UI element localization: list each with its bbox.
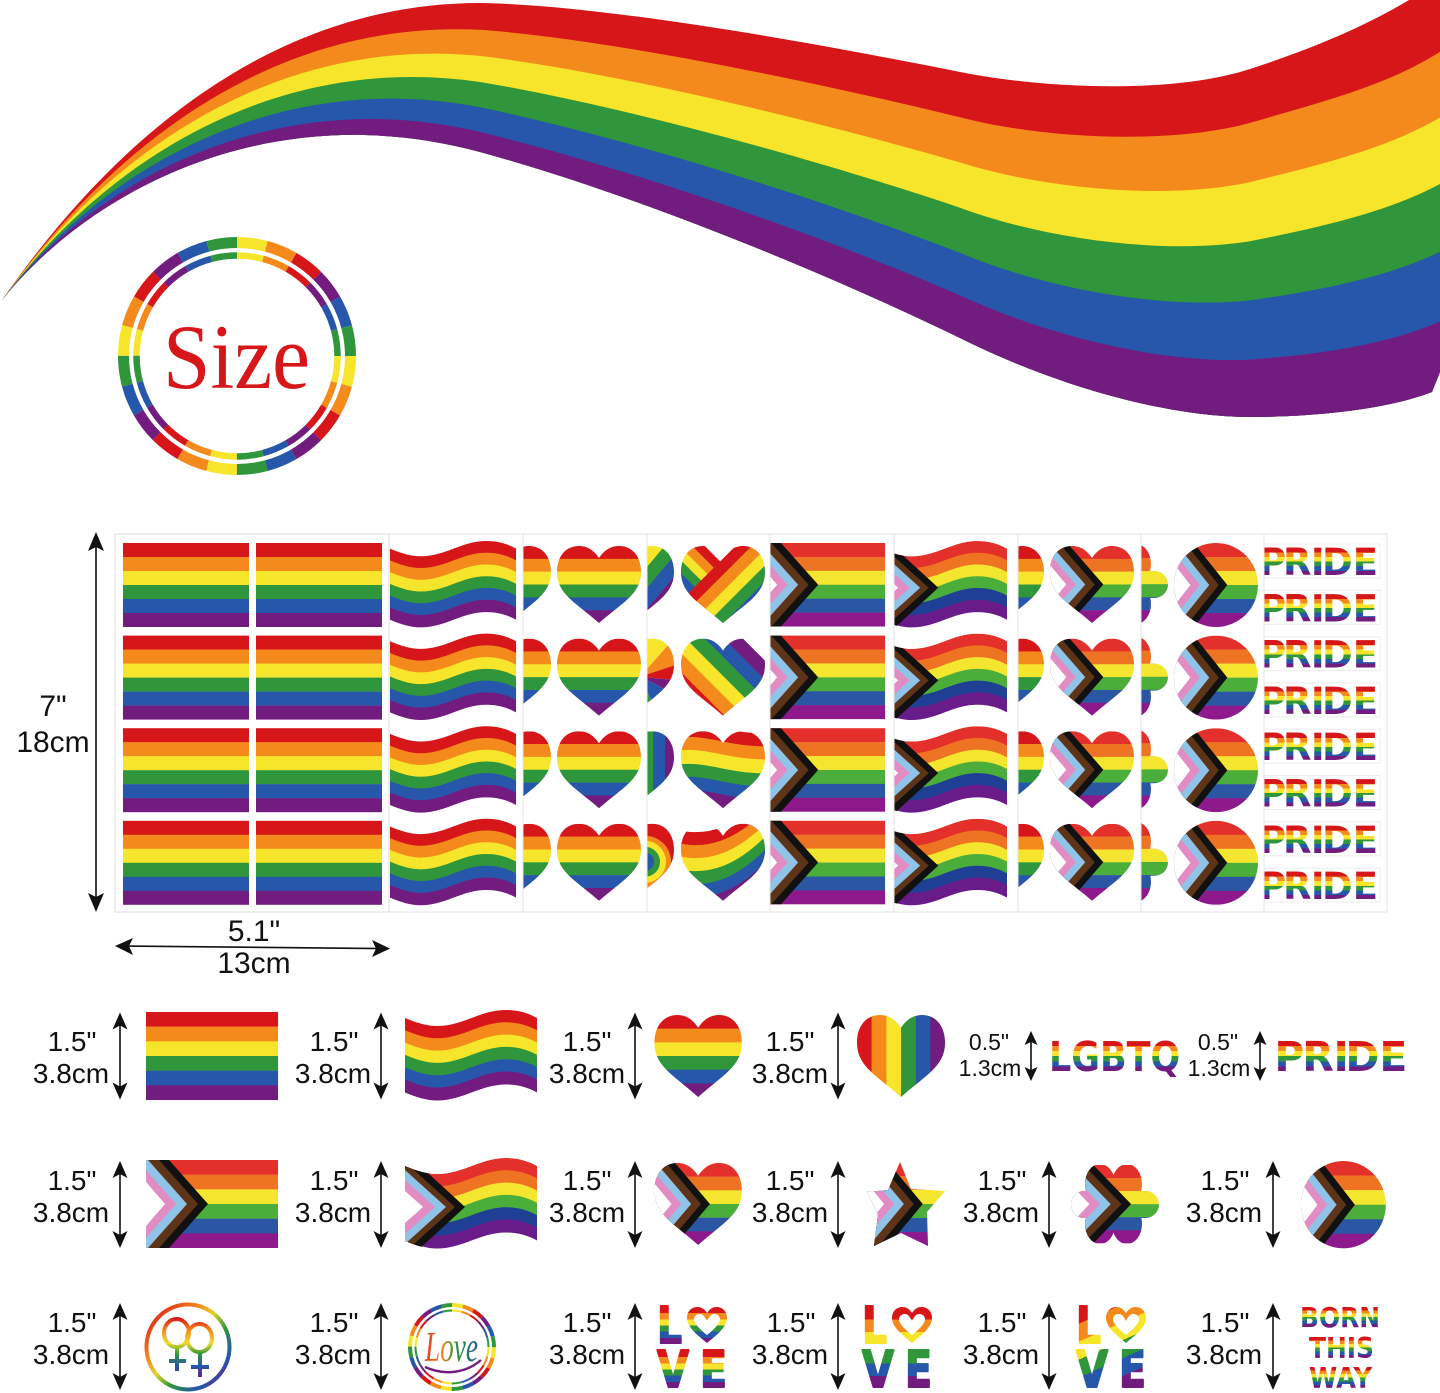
row 1: flag sticker with size: 3.8cm (33, 1058, 109, 1089)
sheet 1: rainbow flags (115, 534, 389, 912)
size heading: Size (163, 306, 310, 408)
sheet 7: progress hearts (900, 534, 1164, 912)
row 1: heart sticker with size (549, 1012, 821, 1100)
row 2: progress heart sticker with size: 1.5" (563, 1165, 611, 1196)
sheet 9: pride labels: PRIDE (1259, 819, 1378, 862)
sheet 9: pride labels: PRIDE (1259, 587, 1378, 630)
row 2: progress heart sticker with size: 3.8cm (549, 1197, 625, 1228)
row 3: LOVE sticker split rainbow with size: 1.5" (767, 1307, 815, 1338)
row 1: vertical stripe heart sticker with size: 1.5" (766, 1026, 814, 1057)
sheet 9: pride labels (1259, 534, 1387, 912)
row 1: vertical stripe heart sticker with size: 3.8cm (752, 1058, 828, 1089)
row 2: progress flower sticker with size (963, 1161, 1199, 1248)
row 2: progress flag sticker with size: 1.5" (48, 1165, 96, 1196)
sheet 4: patterned hearts (536, 468, 843, 912)
icon: rainbow ring (146, 1304, 230, 1390)
row 1: PRIDE label with size: PRIDE (1274, 1033, 1407, 1081)
sheet height dimension: 7" (39, 690, 67, 723)
sheet 9: pride labels: PRIDE (1259, 680, 1378, 723)
sheet height dimension: 18cm (16, 726, 90, 759)
sheet width dimension: 5.1" (228, 915, 280, 948)
sheet 9: pride labels: PRIDE (1259, 726, 1378, 769)
row 1: waving flag sticker with size (295, 1010, 537, 1100)
row 3: LOVE sticker split rainbow with size (752, 1297, 932, 1393)
row 3: female symbols sticker with size: 1.5" (48, 1307, 96, 1338)
icon: double rainbow ring (410, 1305, 494, 1389)
sheet 9: pride labels: PRIDE (1259, 772, 1378, 816)
row 3: LOVE sticker full stripes with size: 3.8cm (549, 1339, 625, 1370)
row 2: progress flower sticker with size: 1.5" (978, 1165, 1026, 1196)
row 1: waving flag sticker with size: 3.8cm (295, 1058, 371, 1089)
sheet 6: progress waving flags (881, 534, 1018, 918)
rainbow ribbon banner (2, 0, 1440, 417)
row 2: progress star sticker with size: 1.5" (766, 1165, 814, 1196)
row 1: LGBTQ label with size: 0.5" (969, 1029, 1009, 1055)
row 3: love sticker with size (295, 1303, 494, 1390)
inner rainbow ring (136, 256, 338, 456)
row 2: progress flower sticker with size: 3.8cm (963, 1197, 1039, 1228)
row 2: progress waving flag sticker with size (295, 1152, 537, 1262)
row 3: BORN THIS WAY sticker with size: 1.5" (1201, 1307, 1249, 1338)
row 1: PRIDE label with size (1188, 1029, 1407, 1081)
row 2: progress circle sticker with size (1186, 1161, 1416, 1248)
row 3: BORN THIS WAY sticker with size: 3.8cm (1186, 1339, 1262, 1370)
row 3: LOVE sticker full stripes with size: 1.5" (563, 1307, 611, 1338)
row 3: LOVE sticker diagonal rainbow with size: 1.5" (978, 1307, 1026, 1338)
row 1: heart sticker with size: 1.5" (563, 1026, 611, 1057)
row 3: female symbols sticker with size: 3.8cm (33, 1339, 109, 1370)
sheet 5: progress flags (759, 534, 894, 912)
row 2: progress heart sticker with size (549, 1161, 773, 1248)
row 3: love sticker with size: 1.5" (310, 1307, 358, 1338)
sheet 9: pride labels: PRIDE (1259, 541, 1378, 584)
sheet height dimension (16, 532, 104, 912)
row 3: BORN THIS WAY sticker with size: THIS (1309, 1332, 1374, 1365)
row 3: LOVE sticker split rainbow with size: L (862, 1297, 887, 1356)
row 1: LGBTQ label with size: LGBTQ (1049, 1033, 1180, 1081)
sheet 8: progress circles (1080, 534, 1288, 912)
sheet 9: pride labels: PRIDE (1259, 865, 1378, 908)
row 2: progress waving flag sticker with size: 1.5" (310, 1165, 358, 1196)
row 3: LOVE sticker diagonal rainbow with size: L (1076, 1297, 1101, 1356)
row 1: heart sticker with size: 3.8cm (549, 1058, 625, 1089)
row 3: female symbols sticker with size (33, 1303, 230, 1390)
outer rainbow ring (124, 242, 350, 470)
row 1: PRIDE label with size: 1.3cm (1188, 1055, 1250, 1081)
row 3: LOVE sticker full stripes with size (549, 1297, 727, 1393)
row 3: LOVE sticker diagonal rainbow with size (963, 1297, 1146, 1393)
sheet 3: rainbow hearts (407, 534, 717, 912)
row 1: flag sticker with size: 1.5" (48, 1026, 96, 1057)
row 2: progress star sticker with size: 3.8cm (752, 1197, 828, 1228)
sheet 9: pride labels: PRIDE (1259, 634, 1378, 677)
row 1: waving flag sticker with size: 1.5" (310, 1026, 358, 1057)
icon: linked female symbols (164, 1319, 212, 1377)
row 3: LOVE sticker diagonal rainbow with size: 3.8cm (963, 1339, 1039, 1370)
row 1: PRIDE label with size: 0.5" (1198, 1029, 1238, 1055)
row 1: LGBTQ label with size: 1.3cm (959, 1055, 1021, 1081)
row 2: progress flag sticker with size: 3.8cm (33, 1197, 109, 1228)
script word love: Love (424, 1325, 478, 1371)
row 1: LGBTQ label with size (959, 1029, 1180, 1081)
row 2: progress flag sticker with size (33, 1160, 278, 1248)
sheet 2: rainbow waving flags (389, 534, 523, 912)
row 3: LOVE sticker full stripes with size: L (657, 1297, 682, 1356)
sticker sheets panel (115, 468, 1387, 918)
sheet width dimension (115, 915, 390, 980)
row 2: progress waving flag sticker with size: 3.8cm (295, 1197, 371, 1228)
row 3: BORN THIS WAY sticker with size: BORN (1300, 1302, 1380, 1334)
size badge (124, 242, 350, 470)
row 1: vertical stripe heart sticker with size (752, 1012, 945, 1100)
swash under love (425, 1360, 481, 1372)
row 2: progress circle sticker with size: 3.8cm (1186, 1197, 1262, 1228)
row 3: love sticker with size: 3.8cm (295, 1339, 371, 1370)
row 1: flag sticker with size (33, 1012, 278, 1100)
row 2: progress circle sticker with size: 1.5" (1201, 1165, 1249, 1196)
row 3: LOVE sticker split rainbow with size: 3.8cm (752, 1339, 828, 1370)
row 2: progress star sticker with size (752, 1161, 986, 1248)
row 3: BORN THIS WAY sticker with size (1186, 1302, 1380, 1393)
sheet width dimension: 13cm (217, 947, 291, 980)
